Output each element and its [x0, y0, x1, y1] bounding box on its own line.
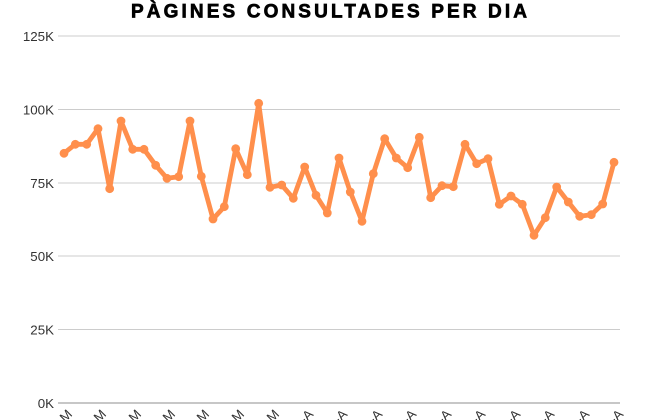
title: PÀGINES CONSULTADES PER DIA — [131, 0, 527, 22]
data series line — [60, 99, 618, 240]
y axis labels: 75K — [30, 176, 54, 191]
y axis labels: 100K — [23, 102, 54, 118]
y axis labels: 125K — [23, 29, 54, 44]
y axis labels — [23, 29, 54, 411]
y axis labels: 50K — [30, 249, 54, 264]
y axis labels: 25K — [30, 322, 54, 338]
x axis labels — [57, 406, 626, 420]
y axis labels: 0K — [38, 396, 54, 411]
